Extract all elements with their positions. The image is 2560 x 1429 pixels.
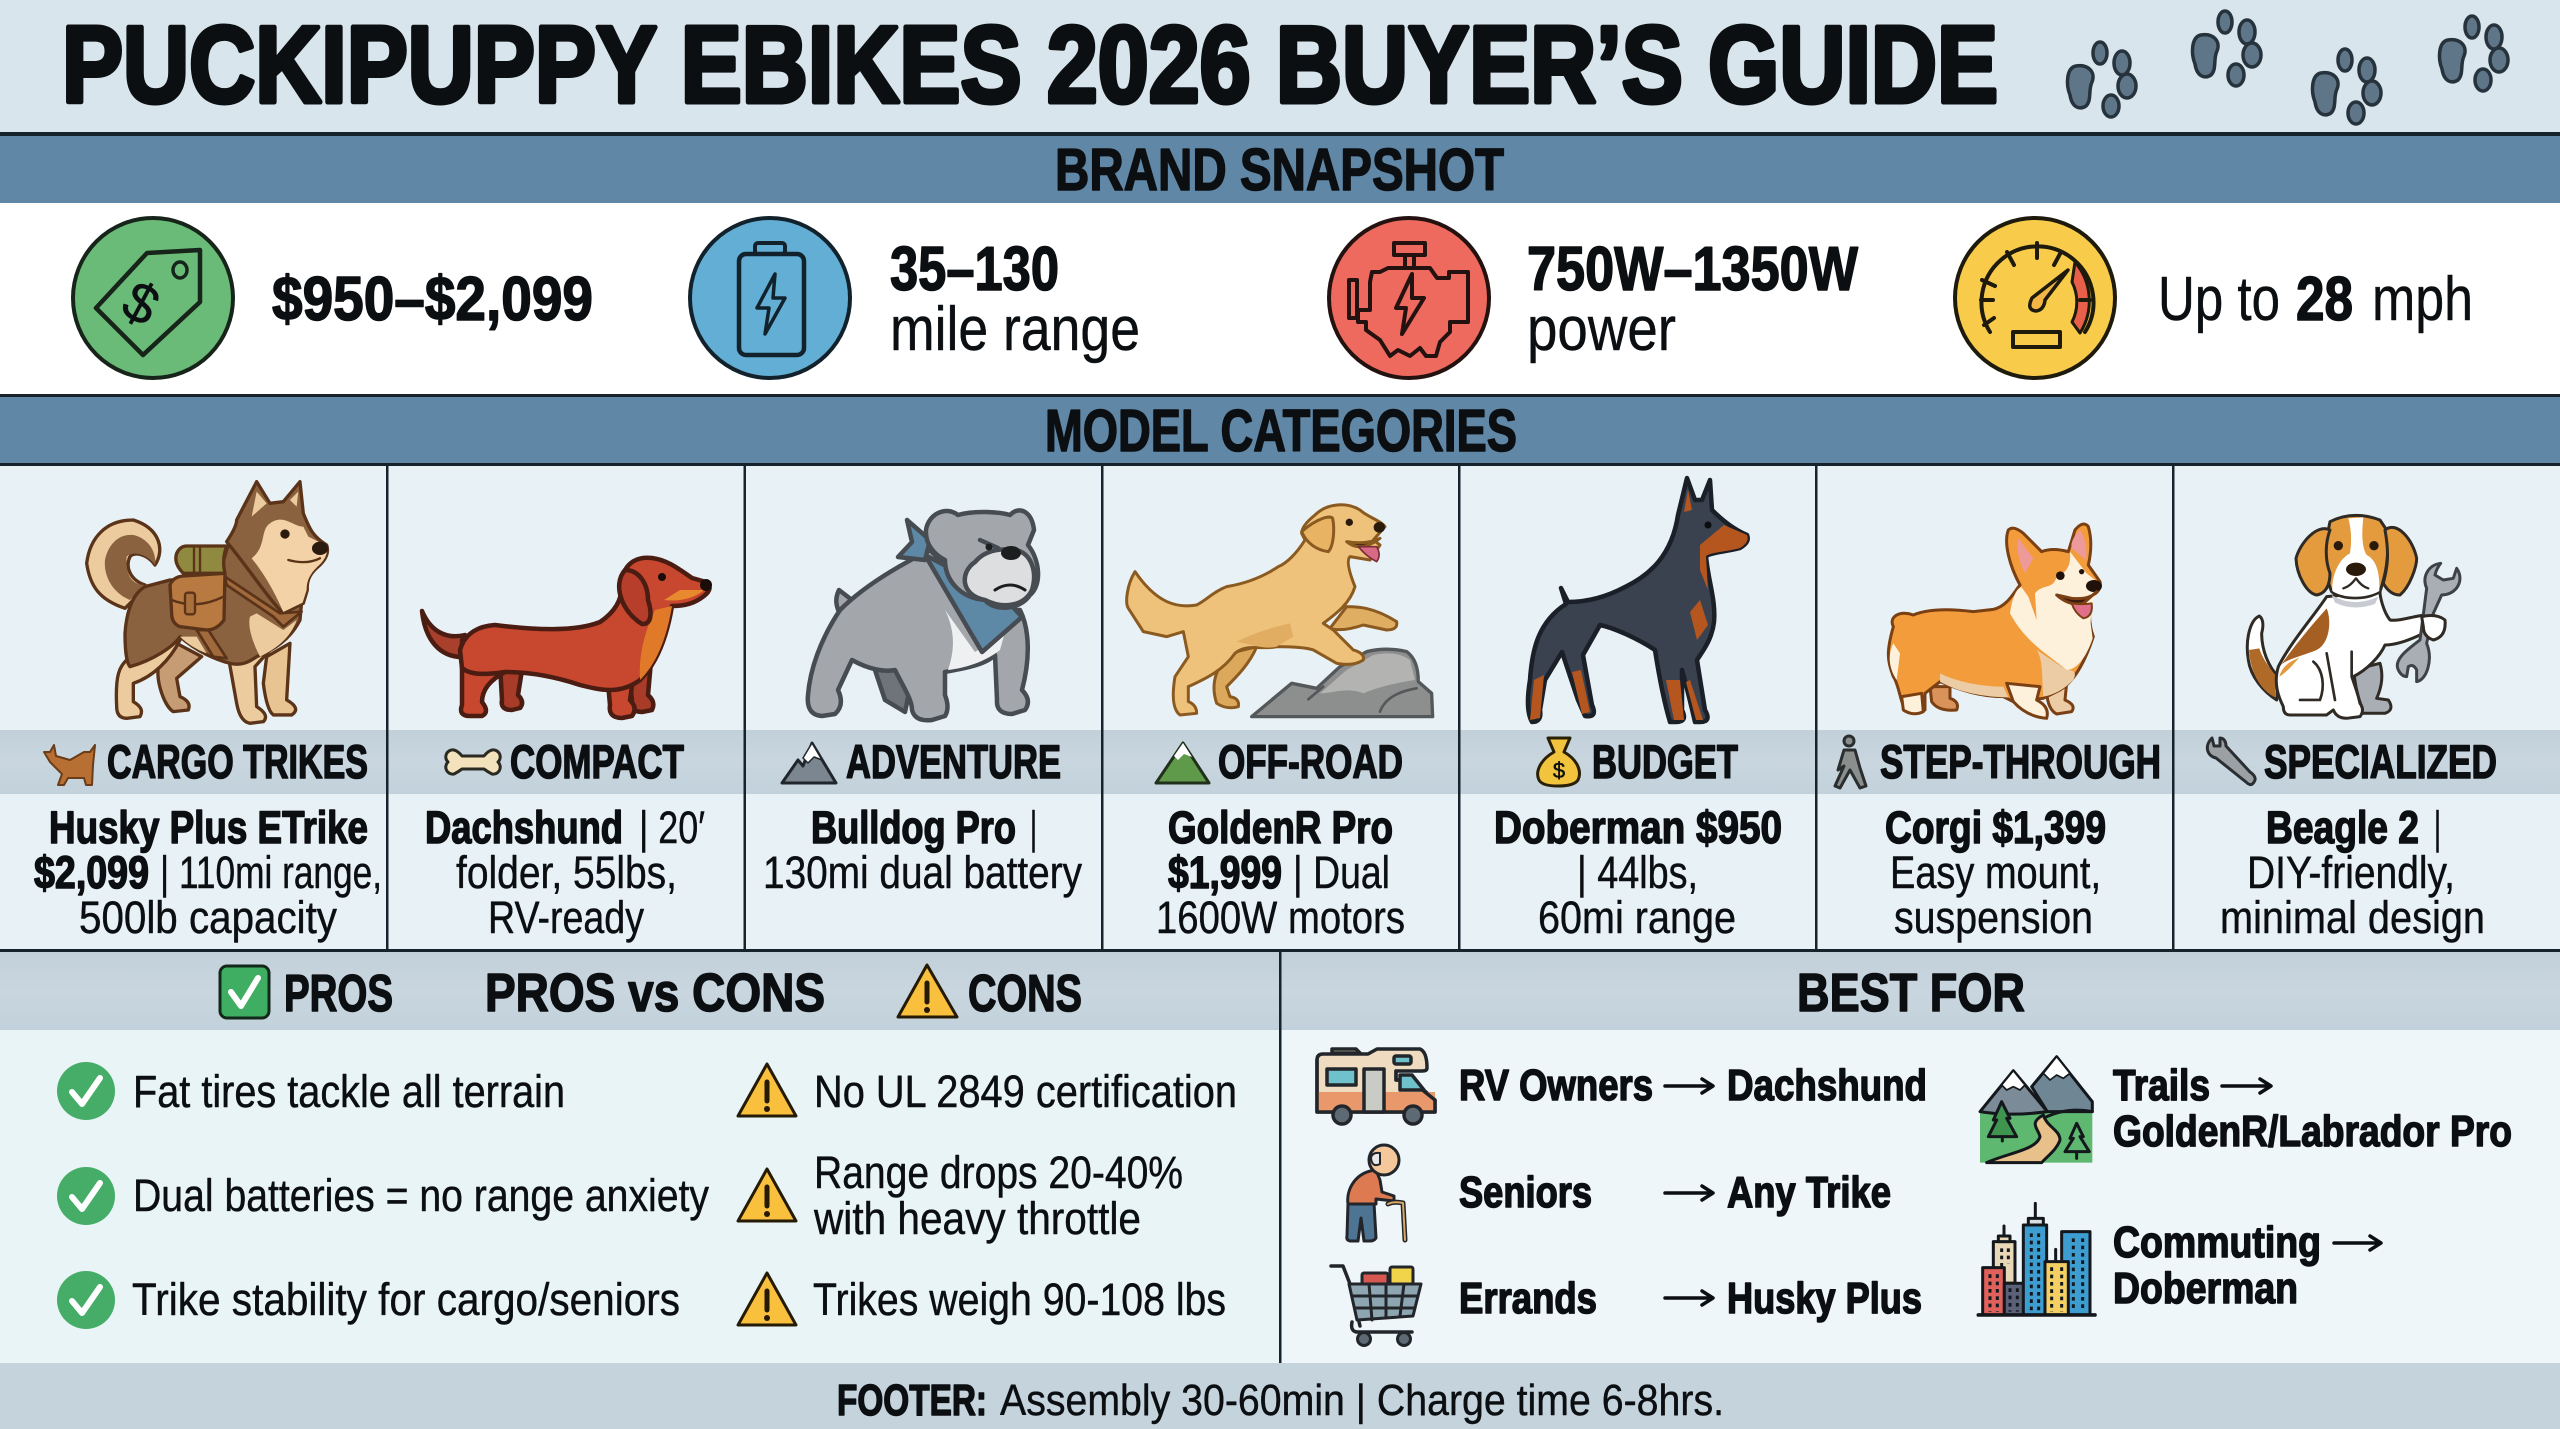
stat: top speed: 28 — [2296, 265, 2353, 334]
stat: range: 35–130 — [890, 235, 1059, 304]
text: doberman — [1494, 802, 1782, 943]
label: budget — [1538, 735, 1738, 788]
con item 2: Range drops 20-40% — [814, 1147, 1183, 1198]
illustration: husky with pack — [87, 482, 328, 723]
con item 1: No UL 2849 certification — [814, 1066, 1237, 1117]
text: beagle 2: Beagle 2 — [2266, 802, 2419, 853]
stat: range: mile range — [890, 295, 1140, 364]
title: PUCKIPUPPY EBIKES 2026 BUYER’S GUIDE — [62, 4, 1998, 126]
label: specialized — [2207, 735, 2497, 788]
icon: green check box — [220, 966, 269, 1018]
text: dachshund: RV-ready — [488, 892, 644, 943]
icon: paw prints — [2068, 11, 2508, 124]
row: commuting — [1978, 1203, 2381, 1315]
row: rv owners: Dachshund — [1727, 1061, 1927, 1110]
panel: brand snapshot — [0, 203, 2560, 395]
illustration: golden retriever on rock — [1127, 505, 1433, 717]
icon: battery — [690, 218, 850, 378]
footer: Assembly 30-60min | Charge time 6-8hrs. — [1000, 1376, 1724, 1425]
text: doberman: Doberman $950 — [1494, 802, 1782, 853]
row: seniors: Seniors — [1459, 1168, 1592, 1217]
illustration: beagle with wrench — [2247, 515, 2460, 718]
section bar: brand snapshot: BRAND SNAPSHOT — [1055, 137, 1504, 203]
row: seniors — [1347, 1145, 1891, 1241]
stat: top speed: Up to — [2158, 265, 2280, 334]
stat: price: $950–$2,099 — [272, 265, 593, 334]
text: dachshund — [425, 802, 705, 943]
label: compact — [446, 735, 684, 788]
icon: dog — [44, 745, 95, 785]
heading: pros vs cons: PROS vs CONS — [485, 963, 825, 1023]
label: adventure: ADVENTURE — [846, 735, 1061, 788]
column: adventure — [763, 510, 1082, 898]
row: trails: Trails — [2113, 1061, 2210, 1110]
panel: best for — [1281, 952, 2560, 1363]
stat: top speed: mph — [2372, 265, 2473, 334]
con item 2 — [738, 1147, 1183, 1244]
column: step-through — [1835, 524, 2161, 943]
row: rv owners — [1317, 1049, 1927, 1124]
pro item 3: Trike stability for cargo/seniors — [132, 1274, 680, 1325]
icon: price tag — [73, 218, 233, 378]
stat: power: power — [1527, 295, 1676, 364]
row: errands — [1331, 1266, 1922, 1346]
stat: top speed — [2158, 265, 2473, 334]
pro item 1: Fat tires tackle all terrain — [133, 1066, 565, 1117]
heading: pros vs cons: CONS — [968, 965, 1082, 1023]
illustration: corgi — [1888, 524, 2102, 718]
heading: pros vs cons: PROS — [284, 965, 393, 1023]
row: errands: Husky Plus — [1727, 1274, 1922, 1323]
arrow — [1665, 1291, 1713, 1305]
stat: power — [1527, 235, 1858, 364]
text: dachshund: Dachshund — [425, 802, 623, 853]
label: compact: COMPACT — [510, 735, 684, 788]
illustration: dachshund — [422, 558, 712, 718]
text: corgi: Easy mount, — [1890, 847, 2101, 898]
label: cargo trikes — [44, 735, 368, 788]
pro item 2: Dual batteries = no range anxiety — [133, 1170, 709, 1221]
label: cargo trikes: CARGO TRIKES — [107, 735, 368, 788]
label: off-road — [1156, 735, 1403, 788]
icon: warning triangle — [898, 965, 957, 1017]
icon: RV — [1317, 1049, 1435, 1124]
text: goldenr pro — [1156, 802, 1405, 943]
column: specialized — [2207, 515, 2497, 943]
text: corgi: Corgi $1,399 — [1885, 802, 2106, 853]
section bar: model categories: MODEL CATEGORIES — [1045, 398, 1517, 464]
arrow — [2334, 1236, 2381, 1250]
row: rv owners: RV Owners — [1459, 1061, 1653, 1110]
stat: range — [890, 235, 1140, 364]
icon: wrench — [2207, 738, 2255, 785]
icon: mountain — [782, 743, 836, 783]
con item 2: with heavy throttle — [813, 1193, 1141, 1244]
text: goldenr pro: GoldenR Pro — [1168, 802, 1393, 853]
icon: walking figure — [1835, 736, 1866, 788]
text: goldenr pro: $1,999 — [1168, 847, 1282, 898]
icon: shopping cart — [1331, 1266, 1421, 1346]
footer: FOOTER: — [837, 1376, 987, 1425]
arrow — [1665, 1186, 1713, 1200]
text: beagle 2: | — [2434, 802, 2441, 853]
row: commuting: Doberman — [2113, 1264, 2298, 1313]
label: budget: BUDGET — [1592, 735, 1738, 788]
text: bulldog pro: 130mi dual battery — [763, 847, 1082, 898]
text: bulldog pro: | — [1030, 802, 1037, 853]
heading: best for: BEST FOR — [1797, 963, 2025, 1023]
label: adventure — [782, 735, 1061, 788]
text: doberman: | 44lbs, — [1577, 847, 1698, 898]
text: corgi: suspension — [1894, 892, 2093, 943]
section bar: model categories — [0, 397, 2560, 464]
panel: pros vs cons — [0, 952, 1279, 1363]
row: commuting: Commuting — [2113, 1218, 2321, 1267]
text: goldenr pro: 1600W motors — [1156, 892, 1405, 943]
icon: money bag — [1538, 738, 1579, 786]
icon: speedometer — [1955, 218, 2115, 378]
title band — [0, 0, 2560, 133]
text: dachshund: | 20′ — [639, 802, 705, 853]
icon: green mountain — [1156, 743, 1209, 783]
label: off-road: OFF-ROAD — [1218, 735, 1403, 788]
illustration: doberman — [1528, 478, 1748, 722]
heading: pros vs cons — [220, 963, 1082, 1023]
con item 3: Trikes weigh 90-108 lbs — [813, 1274, 1226, 1325]
row: errands: Errands — [1459, 1274, 1597, 1323]
column: off-road — [1127, 505, 1433, 943]
text: beagle 2: minimal design — [2220, 892, 2485, 943]
icon: senior with cane — [1347, 1145, 1405, 1241]
pro item 2 — [57, 1167, 709, 1225]
text: dachshund: folder, 55lbs, — [456, 847, 677, 898]
label: step-through: STEP-THROUGH — [1880, 735, 2161, 788]
footer — [0, 1363, 2560, 1429]
text: goldenr pro: | Dual — [1293, 847, 1390, 898]
text: husky plus etrike: Husky Plus ETrike — [49, 802, 368, 853]
icon: price tag: $ — [113, 268, 170, 338]
text: husky plus etrike — [34, 802, 382, 943]
icon: city skyline — [1978, 1203, 2095, 1315]
icon: bone — [446, 750, 500, 774]
icon: motor — [1329, 218, 1489, 378]
text: husky plus etrike: | 110mi range, — [160, 847, 382, 898]
text: corgi — [1885, 802, 2106, 943]
text: husky plus etrike: 500lb capacity — [79, 892, 337, 943]
text: beagle 2: DIY-friendly, — [2247, 847, 2455, 898]
text: bulldog pro: Bulldog Pro — [811, 802, 1016, 853]
row: seniors: Any Trike — [1727, 1168, 1891, 1217]
arrow — [2222, 1079, 2271, 1093]
column: cargo trikes — [34, 482, 382, 943]
section bar: brand snapshot — [0, 136, 2560, 203]
icon: mountain trail — [1980, 1057, 2092, 1163]
illustration: bulldog — [808, 510, 1038, 720]
column: compact — [422, 558, 712, 943]
text: doberman: 60mi range — [1538, 892, 1736, 943]
arrow — [1665, 1079, 1713, 1093]
text: bulldog pro — [763, 802, 1082, 898]
text: beagle 2 — [2220, 802, 2485, 943]
stat: power: 750W–1350W — [1527, 235, 1858, 304]
label: budget: $ — [1553, 758, 1565, 783]
text: husky plus etrike: $2,099 — [34, 847, 149, 898]
pro item 1 — [57, 1062, 565, 1120]
row: trails — [1980, 1057, 2512, 1163]
column: budget — [1494, 478, 1782, 943]
label: step-through — [1835, 735, 2161, 788]
